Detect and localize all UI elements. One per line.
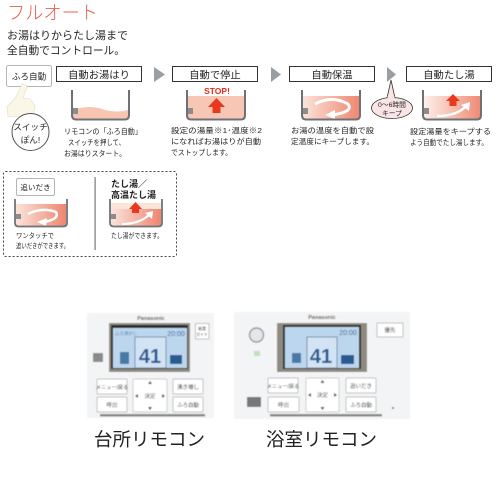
arrow 2 [271, 67, 281, 82]
step 1 heading: 自動お湯はり [68, 68, 130, 82]
bathroom remote: ふろ自動 [350, 401, 372, 409]
bathroom remote: 呼出 [278, 401, 289, 409]
bathroom remote: 41 [310, 346, 332, 368]
step 2 caption: でストップします。 [171, 148, 232, 157]
step 2 heading: 自動で停止 [189, 68, 241, 82]
arrow 3 [387, 67, 396, 82]
tub 4 with add arrow [423, 90, 481, 120]
callout: keep 0-6 hours: キープ [382, 110, 402, 118]
step 4 caption: よう自動でたし湯します。 [410, 138, 488, 147]
bathroom remote [234, 312, 410, 450]
buttons [196, 324, 209, 339]
button: bath auto with finger: ふろ自動 [12, 70, 47, 82]
step 1 heading [56, 66, 142, 82]
step 1 caption: スイッチを押して、 [68, 138, 125, 147]
bathroom remote: メニュー/戻る [267, 383, 299, 390]
tub: add hot water [110, 199, 162, 226]
tub 2 with stop arrow [187, 86, 245, 120]
kitchen remote: 給湯 [198, 326, 206, 331]
heading: add hot water: たし湯／ [111, 178, 147, 189]
arrow 1 [154, 67, 165, 82]
kitchen remote: 41 [139, 346, 161, 368]
step 1 caption: リモコンの「ふろ自動」 [64, 127, 142, 136]
callout: switch: スイッチ [13, 122, 48, 132]
kitchen remote: メニュー/戻る [96, 384, 128, 391]
button: reheat: 追いだき [20, 182, 51, 192]
step 4 caption [410, 126, 491, 147]
step 2 heading [172, 66, 258, 82]
reheat caption [16, 231, 69, 250]
panel: optional functions [4, 172, 176, 256]
button: reheat [16, 178, 54, 196]
step 2 caption [171, 125, 262, 157]
intro text: お湯はりからたし湯まで [7, 29, 128, 42]
kitchen remote: 呼出 [106, 401, 118, 409]
callout: switch: ぽん! [21, 135, 40, 145]
button: bath auto with finger [6, 66, 52, 117]
bathroom remote label: 浴室リモコン [266, 429, 377, 450]
bathroom remote: 優先 [384, 326, 396, 334]
step 3 caption: 定温度にキープします。 [291, 136, 374, 146]
step 4 caption: 設定湯量をキープする [410, 126, 491, 136]
kitchen remote: Panasonic [137, 316, 165, 322]
step 3 heading [290, 66, 374, 82]
heading: add hot water: 高温たし湯 [111, 189, 156, 200]
intro text [7, 29, 128, 57]
heading: add hot water [111, 178, 156, 200]
step 3 heading: 自動保温 [311, 68, 353, 82]
step 1 caption: お湯はりスタート。 [64, 149, 126, 158]
step 4 heading: 自動たし湯 [423, 68, 475, 82]
reheat caption: ワンタッチで [16, 231, 54, 240]
kitchen remote: 20:00 [167, 331, 185, 338]
bathroom remote: 20:00 [339, 330, 357, 337]
reheat caption: 追いだきができます。 [16, 241, 69, 250]
kitchen remote: ガイド [196, 332, 208, 337]
bathroom remote: 追いだき [350, 382, 372, 390]
step 2 caption: になればお湯はりが自動 [171, 136, 261, 146]
bathroom remote: 決定 [317, 391, 328, 399]
title: フルオート [7, 3, 98, 24]
add hot water caption: たし湯ができます。 [111, 231, 163, 240]
callout: switch [12, 114, 49, 150]
kitchen remote: ふろ自動 [177, 401, 199, 409]
tub 3 with circulation arrow [302, 90, 360, 120]
tub 2 with stop arrow: STOP! [204, 86, 230, 96]
intro text: 全自動でコントロール。 [7, 43, 125, 57]
kitchen remote label: 台所リモコン [94, 429, 205, 450]
callout: keep 0-6 hours [372, 80, 412, 118]
step 2 caption: 設定の湯量※1･温度※2 [171, 125, 262, 135]
screen [277, 323, 367, 372]
kitchen remote: 沸き増し [177, 383, 199, 391]
tub 1 [72, 90, 129, 120]
callout: keep 0-6 hours: 0〜6時間 [378, 101, 406, 109]
step 3 caption [291, 125, 374, 146]
bathroom remote: Panasonic [308, 315, 336, 321]
screen [109, 323, 190, 372]
tub: reheat [15, 199, 67, 226]
step 3 caption: お湯の温度を自動で設 [291, 125, 374, 135]
kitchen remote [87, 313, 214, 450]
kitchen remote: 決定 [144, 392, 156, 400]
step 4 heading [406, 66, 492, 82]
step 1 caption [64, 127, 142, 158]
buttons [377, 323, 403, 337]
kitchen remote: ふろ沸かし [115, 330, 138, 337]
